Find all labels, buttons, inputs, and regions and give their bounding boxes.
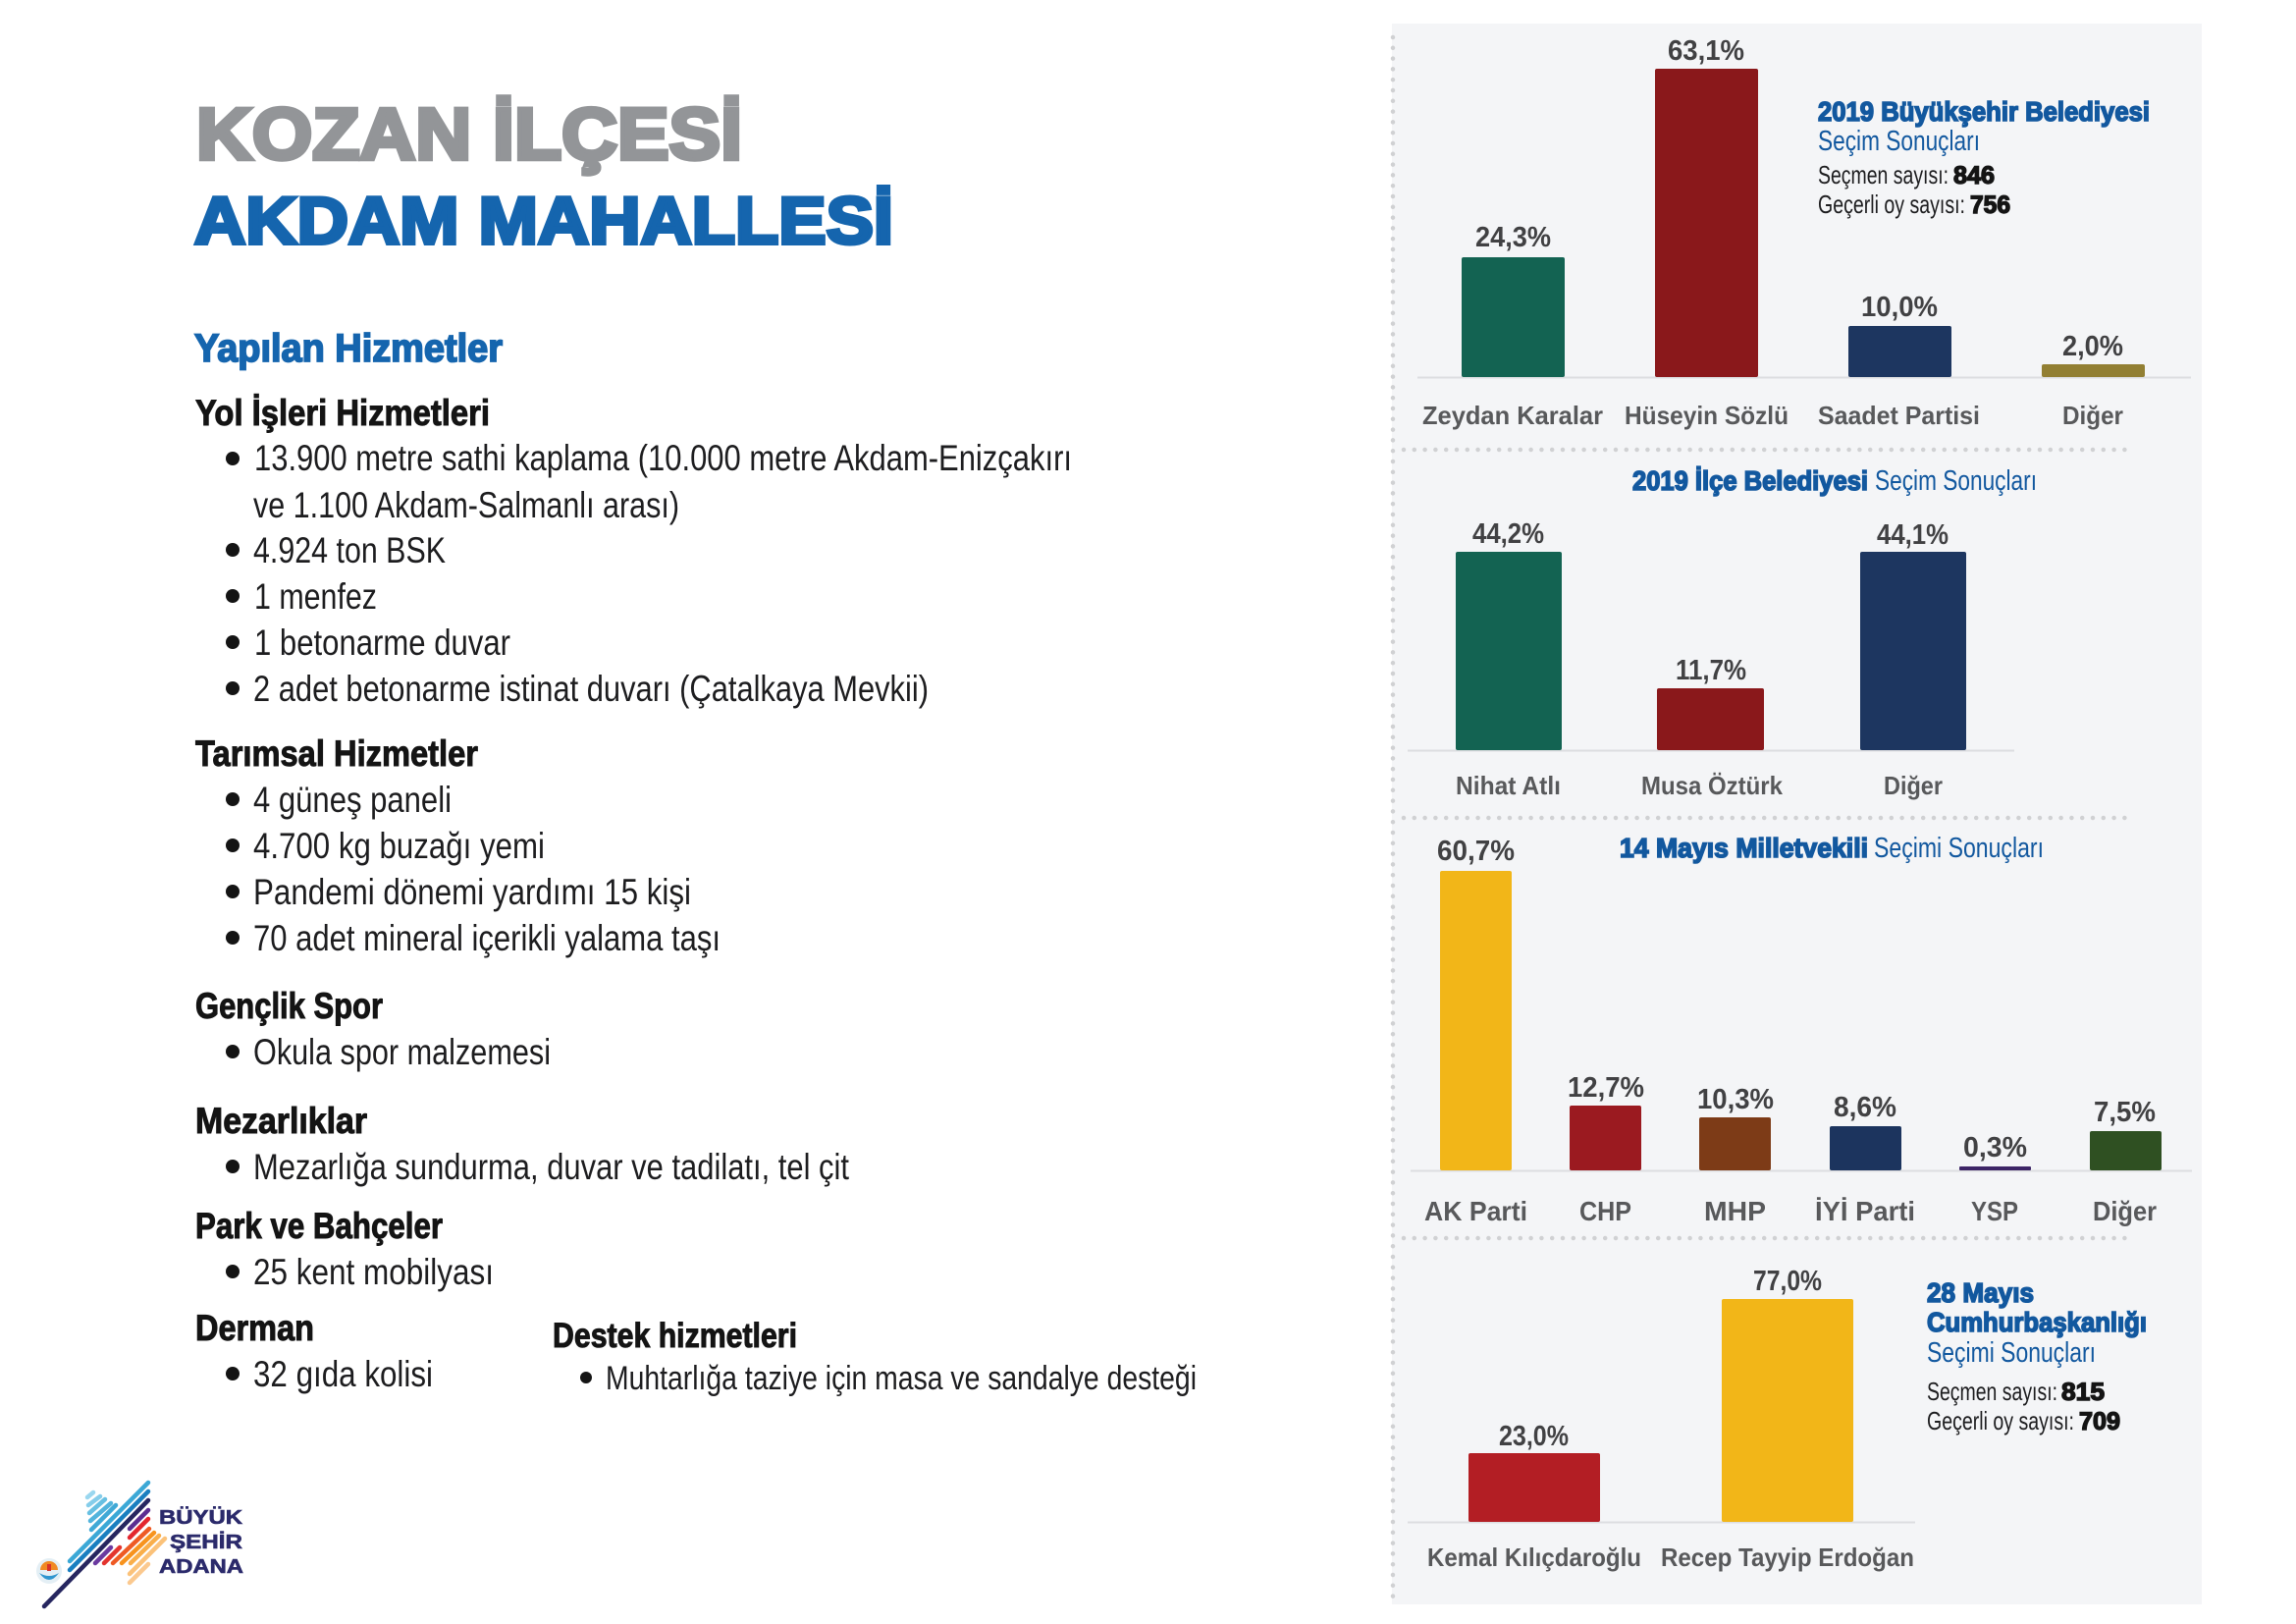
logo: Büyükşehir Adana <box>36 1483 243 1606</box>
text block: parks and gardens: 25 kent mobilyası <box>253 1252 494 1292</box>
text block: cemeteries <box>195 1101 850 1187</box>
chart heading: 14 May parliamentary: 14 Mayıs Milletvekili <box>1620 833 1868 863</box>
bar chart: 2019 metropolitan municipality: Zeydan Karalar <box>1422 401 1603 430</box>
text block: road works: Yol İşleri Hizmetleri <box>195 393 490 433</box>
text block: agricultural services: 4.700 kg buzağı yemi <box>253 826 545 866</box>
text block: road works: 1 betonarme duvar <box>254 623 510 663</box>
bar chart: 14 May parliamentary: 7,5% <box>2094 1097 2156 1128</box>
chart heading: 28 May presidential: Cumhurbaşkanlığı <box>1927 1307 2147 1337</box>
bar chart: 2019 district municipality: 44,1% <box>1877 519 1949 551</box>
chart heading: 2019 district municipality <box>1632 465 2037 497</box>
bar chart: 14 May parliamentary: 60,7% <box>1437 836 1515 867</box>
bar chart: 14 May parliamentary: YSP <box>1971 1196 2018 1226</box>
chart heading: 2019 district municipality: Seçim Sonuçları <box>1875 465 2037 497</box>
chart heading: 2019 metropolitan municipality: Seçim Sonuçları <box>1818 126 1980 157</box>
text block: derman: Derman <box>195 1308 314 1348</box>
text block: derman <box>195 1308 433 1394</box>
chart heading: 2019 metropolitan municipality: 2019 Büyükşehir Belediyesi <box>1818 96 2150 127</box>
logo wordmark: BÜYÜK <box>159 1506 243 1529</box>
logo wordmark: ŞEHİR <box>170 1531 243 1553</box>
chart heading: 28 May presidential: Seçmen sayısı: <box>1927 1377 2057 1406</box>
bar chart: 2019 metropolitan municipality: 2,0% <box>2062 331 2123 362</box>
chart heading: 28 May presidential <box>1927 1277 2147 1435</box>
text block: parks and gardens <box>195 1206 494 1292</box>
chart heading: 28 May presidential: 815 <box>2061 1379 2105 1406</box>
text block: youth sports <box>195 986 551 1072</box>
bar chart: 28 May presidential: 77,0% <box>1753 1266 1822 1297</box>
heading: services: Yapılan Hizmetler <box>194 327 503 370</box>
chart heading: 2019 metropolitan municipality <box>1818 96 2150 219</box>
bar chart: 28 May presidential: 23,0% <box>1499 1421 1569 1452</box>
text block: road works: 2 adet betonarme istinat duvarı (Çatalkaya Mevkii) <box>253 669 929 709</box>
text block: agricultural services: 70 adet mineral içerikli yalama taşı <box>253 918 721 958</box>
logo wordmark: ADANA <box>159 1556 243 1578</box>
bar chart: 2019 metropolitan municipality: Saadet Partisi <box>1818 401 1980 430</box>
chart heading: 2019 metropolitan municipality: 846 <box>1953 162 1995 189</box>
icon: star stripes <box>44 1483 165 1606</box>
bar chart: 2019 district municipality: 44,2% <box>1472 518 1544 550</box>
chart heading: 2019 metropolitan municipality: 756 <box>1970 191 2010 219</box>
text block: youth sports: Gençlik Spor <box>195 986 383 1026</box>
chart heading: 2019 district municipality: 2019 İlçe Belediyesi <box>1632 465 1868 496</box>
bar chart: 2019 metropolitan municipality <box>1417 35 2191 430</box>
bar chart: 2019 metropolitan municipality: 10,0% <box>1861 292 1938 323</box>
bar chart: 14 May parliamentary <box>1411 836 2192 1226</box>
chart heading: 28 May presidential: 709 <box>2079 1408 2120 1435</box>
text block: cemeteries: Mezarlıklar <box>195 1101 367 1141</box>
bar chart: 2019 district municipality: Nihat Atlı <box>1456 771 1561 800</box>
bar chart: 14 May parliamentary: 12,7% <box>1568 1072 1644 1104</box>
bar chart: 2019 metropolitan municipality: 24,3% <box>1475 222 1551 253</box>
title: AKDAM MAHALLESİ <box>194 184 893 258</box>
text block: support services <box>553 1317 1197 1397</box>
chart heading: 28 May presidential: Seçimi Sonuçları <box>1927 1337 2096 1369</box>
text block: road works: 4.924 ton BSK <box>253 530 446 570</box>
text block: road works: 1 menfez <box>254 576 377 617</box>
bar chart: 28 May presidential: Recep Tayyip Erdoğan <box>1661 1543 1914 1572</box>
text block: support services: Destek hizmetleri <box>553 1317 797 1355</box>
bar chart: 14 May parliamentary: 8,6% <box>1834 1092 1896 1123</box>
bar chart: 2019 metropolitan municipality: 63,1% <box>1668 35 1744 67</box>
bar chart: 14 May parliamentary: 10,3% <box>1697 1084 1774 1115</box>
bar chart: 14 May parliamentary: İYİ Parti <box>1815 1196 1915 1226</box>
text block: cemeteries: Mezarlığa sundurma, duvar ve tadilatı, tel çit <box>253 1147 850 1187</box>
text block: support services: Muhtarlığa taziye için masa ve sandalye desteği <box>606 1360 1197 1397</box>
chart heading: 28 May presidential: 28 Mayıs <box>1927 1277 2034 1308</box>
bar chart: 14 May parliamentary: MHP <box>1704 1196 1766 1226</box>
text block: agricultural services <box>195 733 721 958</box>
bar chart: 2019 district municipality: Diğer <box>1884 771 1943 800</box>
logo wordmark <box>159 1506 243 1578</box>
text block: youth sports: Okula spor malzemesi <box>253 1032 551 1072</box>
chart heading: 28 May presidential: Geçerli oy sayısı: <box>1927 1406 2074 1435</box>
chart heading: 2019 metropolitan municipality: Seçmen sayısı: <box>1818 160 1949 189</box>
bar chart: 14 May parliamentary: CHP <box>1579 1196 1631 1226</box>
title: KOZAN İLÇESİ <box>196 93 742 175</box>
bar chart: 14 May parliamentary: Diğer <box>2093 1196 2157 1226</box>
bar chart: 28 May presidential <box>1408 1266 1915 1572</box>
text block: road works: ve 1.100 Akdam-Salmanlı arası) <box>253 485 679 525</box>
chart heading: 14 May parliamentary: Seçimi Sonuçları <box>1874 833 2044 864</box>
bar chart: 2019 district municipality: 11,7% <box>1676 655 1746 686</box>
bar chart: 14 May parliamentary: AK Parti <box>1424 1196 1527 1226</box>
bar chart: 28 May presidential: Kemal Kılıçdaroğlu <box>1427 1543 1641 1572</box>
bar chart: 2019 metropolitan municipality: Diğer <box>2062 401 2123 430</box>
text block: parks and gardens: Park ve Bahçeler <box>195 1206 443 1246</box>
bar chart: 2019 district municipality <box>1408 518 2014 800</box>
text block: agricultural services: Pandemi dönemi yardımı 15 kişi <box>253 872 691 912</box>
text block: agricultural services: 4 güneş paneli <box>253 780 452 820</box>
chart heading: 2019 metropolitan municipality: Geçerli oy sayısı: <box>1818 189 1965 219</box>
bar chart: 2019 district municipality: Musa Öztürk <box>1641 771 1783 800</box>
text block: road works: 13.900 metre sathi kaplama (10.000 metre Akdam-Enizçakırı <box>254 438 1072 478</box>
bar chart: 2019 metropolitan municipality: Hüseyin Sözlü <box>1625 401 1789 430</box>
icon: municipal emblem <box>36 1558 62 1584</box>
title <box>194 93 893 258</box>
panel: election results <box>1392 24 2202 1604</box>
text block: agricultural services: Tarımsal Hizmetler <box>195 733 478 774</box>
chart heading: 14 May parliamentary <box>1620 833 2044 864</box>
text block: derman: 32 gıda kolisi <box>253 1354 433 1394</box>
text block: road works <box>195 393 1072 709</box>
bar chart: 14 May parliamentary: 0,3% <box>1963 1132 2027 1164</box>
